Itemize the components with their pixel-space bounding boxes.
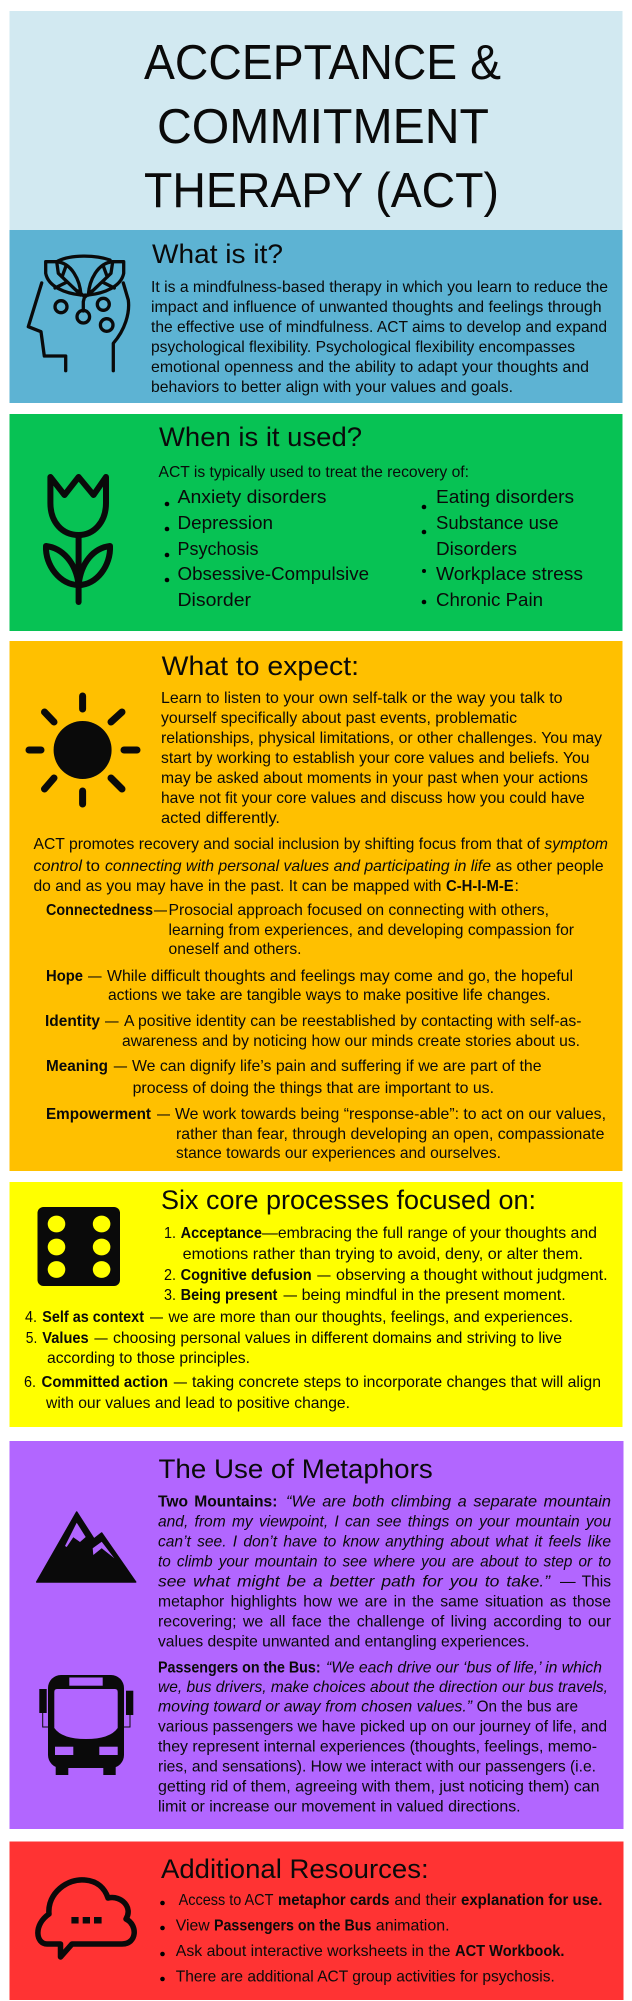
CHIME: meaning bbox=[46, 1058, 542, 1097]
intro text: ACT is typically used to treat the recovery of: bbox=[158, 464, 469, 481]
resource: animation: View bbox=[176, 1917, 210, 1934]
metaphor: two mountains: values despite unwanted and entangling experiences. bbox=[158, 1634, 530, 1651]
metaphor: passengers on the bus bbox=[158, 1660, 608, 1816]
process 4: self as context: 4. bbox=[25, 1309, 37, 1326]
icon: bus bbox=[39, 1675, 133, 1775]
resource: group activities: There are additional ACT group activities for psychosis. bbox=[176, 1969, 555, 1986]
CHIME: identity bbox=[45, 1013, 582, 1050]
body text: self-talk: start by working to establish your core values and beliefs. You bbox=[161, 750, 590, 767]
CHIME: identity: awareness and by noticing how our minds create stories about us. bbox=[122, 1033, 580, 1050]
body text: recovery and C-H-I-M-E intro: : bbox=[514, 878, 519, 895]
metaphor: two mountains bbox=[158, 1494, 612, 1651]
icon: sun bbox=[29, 696, 137, 804]
list: conditions left column: Psychosis bbox=[178, 538, 258, 559]
metaphor: two mountains: metaphor highlights how we are in the same situation as those bbox=[158, 1594, 611, 1611]
metaphor: two mountains: — This bbox=[560, 1574, 611, 1591]
metaphor: passengers on the bus: ries, and sensations). How we interact with our passengers (i.e. bbox=[158, 1759, 596, 1776]
CHIME: empowerment bbox=[46, 1106, 606, 1162]
body text: recovery and C-H-I-M-E intro: connecting with personal values and participating in life bbox=[105, 858, 491, 875]
body text: self-talk bbox=[161, 690, 602, 827]
body text: what is it bbox=[151, 279, 608, 396]
body text: what is it: behaviors to better align with your values and goals. bbox=[151, 379, 513, 396]
CHIME: connectedness: Prosocial approach focused on connecting with others, bbox=[168, 902, 549, 919]
title: ACCEPTANCE & bbox=[144, 36, 501, 90]
metaphor: two mountains: see what might be a better path for you to take.” bbox=[158, 1574, 551, 1591]
CHIME: identity: Identity bbox=[45, 1013, 100, 1030]
list: conditions right column bbox=[422, 486, 583, 610]
metaphor: two mountains: can’t see. I don’t have to know anything about what it feels like bbox=[158, 1534, 611, 1550]
CHIME: meaning: process of doing the things that are important to us. bbox=[133, 1080, 494, 1097]
CHIME: connectedness: — bbox=[154, 902, 167, 919]
CHIME: meaning: Meaning bbox=[46, 1058, 108, 1075]
metaphor: two mountains: and, from my viewpoint, I can see things on your mountain you bbox=[158, 1514, 611, 1530]
list: conditions left column: Depression bbox=[178, 512, 273, 533]
resource: animation: animation. bbox=[376, 1917, 450, 1934]
icon: mountains bbox=[37, 1512, 136, 1582]
CHIME: meaning: We can dignify life’s pain and suffering if we are part of the bbox=[132, 1058, 542, 1075]
process 1: acceptance: 1. bbox=[164, 1225, 176, 1242]
list: conditions right column: Disorders bbox=[436, 538, 517, 559]
resource: workbook bbox=[160, 1943, 564, 1960]
list: conditions left column: Anxiety disorders bbox=[178, 486, 326, 507]
process 4: self as context: we are more than our thoughts, feelings, and experiences. bbox=[168, 1309, 573, 1326]
CHIME: empowerment: rather than fear, through developing an open, compassionate bbox=[176, 1126, 604, 1143]
process 6: committed action: — bbox=[174, 1374, 187, 1391]
CHIME: hope: Hope bbox=[46, 968, 83, 985]
resource: animation: Passengers on the Bus bbox=[214, 1917, 371, 1934]
metaphor: two mountains: to climb your mountain to see where you are about to step or to bbox=[158, 1554, 611, 1571]
process 2: cognitive defusion: 2. bbox=[164, 1267, 176, 1284]
list: conditions left column: Obsessive-Compulsive bbox=[178, 563, 369, 584]
process 3: being present: Being present bbox=[181, 1287, 278, 1304]
heading: when is it used: When is it used? bbox=[159, 422, 362, 452]
body text: recovery and C-H-I-M-E intro: ACT promotes recovery and social inclusion by shifting focus from that of bbox=[34, 836, 541, 853]
body text: what is it: psychological flexibility. Psychological flexibility encompasses bbox=[151, 339, 575, 356]
process 1: acceptance: Acceptance bbox=[181, 1225, 262, 1242]
CHIME: empowerment: Empowerment bbox=[46, 1106, 152, 1123]
title: COMMITMENT bbox=[157, 100, 489, 154]
resource: animation bbox=[160, 1917, 450, 1934]
metaphor: passengers on the bus: we, bus drivers, make choices about the direction our bus travels, bbox=[158, 1679, 608, 1696]
panel: the use of metaphors bbox=[10, 1441, 624, 1829]
list: conditions right column: Chronic Pain bbox=[436, 589, 543, 610]
panel: title bbox=[10, 11, 622, 230]
list: conditions right column: Eating disorders bbox=[436, 486, 574, 507]
metaphor: passengers on the bus: Passengers on the Bus: bbox=[158, 1660, 321, 1676]
CHIME: hope: actions we take are tangible ways to make positive life changes. bbox=[108, 987, 550, 1004]
list: conditions right column: Substance use bbox=[436, 512, 558, 533]
process 5: values: according to those principles. bbox=[47, 1350, 250, 1367]
process 5: values: 5. bbox=[26, 1330, 37, 1347]
resource: metaphor cards: Access to ACT bbox=[179, 1892, 274, 1909]
process 1: acceptance: —embracing the full range of your thoughts and bbox=[262, 1225, 597, 1242]
body text: recovery and C-H-I-M-E intro: as other people bbox=[496, 858, 604, 875]
process 4: self as context: Self as context bbox=[42, 1309, 145, 1326]
body text: what is it: emotional openness and the ability to adapt your thoughts and bbox=[151, 359, 589, 376]
body text: self-talk: yourself specifically about past events, problematic bbox=[161, 710, 517, 727]
icon: die showing six bbox=[38, 1207, 120, 1286]
resource: workbook: Ask about interactive worksheets in the bbox=[176, 1943, 450, 1960]
process 1: acceptance bbox=[164, 1225, 597, 1263]
process 5: values: Values bbox=[42, 1330, 89, 1347]
panel: what to expect bbox=[10, 641, 622, 1171]
body text: recovery and C-H-I-M-E intro: C-H-I-M-E bbox=[446, 878, 514, 895]
process 4: self as context: — bbox=[150, 1309, 163, 1326]
process 5: values: choosing personal values in different domains and striving to live bbox=[113, 1330, 562, 1347]
process 6: committed action bbox=[24, 1374, 601, 1412]
CHIME: connectedness: learning from experiences, and developing compassion for bbox=[168, 922, 575, 939]
title: THERAPY (ACT) bbox=[144, 164, 499, 218]
body text: self-talk: acted differently. bbox=[161, 810, 280, 827]
body text: self-talk: relationships, physical limitations, or other challenges. You may bbox=[161, 730, 602, 747]
heading: what is it: What is it? bbox=[152, 239, 283, 269]
icon: tulip bbox=[46, 477, 110, 602]
title bbox=[144, 36, 501, 218]
body text: recovery and C-H-I-M-E intro: symptom bbox=[544, 836, 608, 853]
metaphor: passengers on the bus: various passengers we have picked up on our journey of life, and bbox=[158, 1718, 607, 1736]
body text: self-talk: Learn to listen to your own self-talk or the way you talk to bbox=[161, 690, 563, 707]
process 6: committed action: with our values and lead to positive change. bbox=[45, 1395, 350, 1412]
icon: cloud speech bubble bbox=[38, 1880, 134, 1957]
resource: metaphor cards: metaphor cards bbox=[278, 1892, 390, 1909]
body text: recovery and C-H-I-M-E intro: do and as you may have in the past. It can be mapped with bbox=[34, 878, 442, 895]
metaphor: passengers on the bus: getting rid of them, agreeing with them, just noticing them) can bbox=[158, 1779, 600, 1796]
resource: metaphor cards: explanation for use. bbox=[461, 1892, 602, 1909]
process 5: values bbox=[26, 1330, 562, 1367]
panel: when is it used bbox=[10, 414, 622, 631]
body text: self-talk: have not fit your core values and discuss how you could have bbox=[161, 790, 585, 807]
icon: head with leaves bbox=[28, 256, 129, 371]
CHIME: connectedness bbox=[46, 902, 575, 958]
metaphor: passengers on the bus: On the bus are bbox=[477, 1698, 578, 1716]
body text: recovery and C-H-I-M-E intro: to bbox=[86, 858, 100, 875]
metaphor: two mountains: Two Mountains: bbox=[158, 1494, 277, 1510]
metaphor: two mountains: “We are both climbing a separate mountain bbox=[286, 1494, 611, 1510]
process 6: committed action: taking concrete steps to incorporate changes that will align bbox=[192, 1374, 601, 1391]
resource: metaphor cards: and their bbox=[394, 1892, 457, 1909]
heading: additional resources: Additional Resources: bbox=[161, 1854, 429, 1884]
heading: the use of metaphors: The Use of Metaphors bbox=[158, 1454, 433, 1484]
resource: metaphor cards bbox=[160, 1892, 602, 1909]
CHIME: empowerment: stance towards our experiences and ourselves. bbox=[176, 1145, 501, 1162]
panel: what is it bbox=[10, 230, 622, 403]
list: conditions left column: Disorder bbox=[178, 589, 251, 610]
process 5: values: — bbox=[94, 1330, 108, 1347]
process 3: being present bbox=[164, 1287, 566, 1304]
CHIME: empowerment: — bbox=[157, 1106, 170, 1123]
metaphor: passengers on the bus: moving toward or away from chosen values.” bbox=[158, 1698, 473, 1716]
list: conditions left column bbox=[165, 486, 369, 610]
metaphor: passengers on the bus: they represent internal experiences (thoughts, feelings, memo- bbox=[158, 1739, 597, 1756]
process 6: committed action: Committed action bbox=[42, 1374, 168, 1391]
process 1: acceptance: emotions rather than trying to avoid, deny, or alter them. bbox=[183, 1246, 583, 1263]
panel: six core processes bbox=[10, 1182, 622, 1427]
body text: recovery and C-H-I-M-E intro: control bbox=[34, 858, 82, 875]
process 6: committed action: 6. bbox=[24, 1374, 36, 1391]
CHIME: connectedness: Connectedness bbox=[46, 902, 153, 919]
CHIME: hope: While difficult thoughts and feelings may come and go, the hopeful bbox=[107, 968, 573, 985]
heading: what to expect: What to expect: bbox=[162, 651, 359, 681]
process 2: cognitive defusion bbox=[164, 1267, 608, 1284]
heading: six core processes: Six core processes focused on: bbox=[161, 1185, 536, 1215]
resource: workbook: ACT Workbook. bbox=[455, 1943, 564, 1960]
CHIME: hope: — bbox=[88, 968, 102, 985]
process 3: being present: 3. bbox=[164, 1287, 176, 1304]
process 2: cognitive defusion: observing a thought without judgment. bbox=[336, 1267, 608, 1284]
CHIME: connectedness: oneself and others. bbox=[168, 941, 302, 958]
process 2: cognitive defusion: Cognitive defusion bbox=[181, 1267, 312, 1284]
CHIME: hope bbox=[46, 968, 573, 1004]
list: conditions right column: Workplace stress bbox=[436, 563, 583, 584]
metaphor: passengers on the bus: limit or increase our movement in valued directions. bbox=[158, 1799, 521, 1816]
CHIME: empowerment: We work towards being “response-able”: to act on our values, bbox=[175, 1106, 606, 1123]
metaphor: two mountains: recovering; we all face the challenge of living according to our bbox=[158, 1614, 612, 1631]
body text: recovery and C-H-I-M-E intro bbox=[34, 836, 608, 895]
body text: what is it: the effective use of mindfulness. ACT aims to develop and expand bbox=[151, 319, 607, 336]
process 3: being present: — bbox=[284, 1287, 297, 1304]
CHIME: identity: A positive identity can be reestablished by contacting with self-as- bbox=[124, 1013, 582, 1030]
body text: what is it: impact and influence of unwanted thoughts and feelings through bbox=[151, 299, 602, 316]
panel: additional resources bbox=[10, 1842, 624, 2000]
CHIME: identity: — bbox=[105, 1013, 119, 1030]
metaphor: passengers on the bus: “We each drive our ‘bus of life,’ in which bbox=[326, 1660, 602, 1676]
process 2: cognitive defusion: — bbox=[317, 1267, 331, 1284]
process 3: being present: being mindful in the present moment. bbox=[302, 1287, 566, 1304]
CHIME: meaning: — bbox=[114, 1058, 127, 1075]
body text: what is it: It is a mindfulness-based therapy in which you learn to reduce the bbox=[151, 279, 608, 296]
body text: self-talk: may be asked about moments in your past when your actions bbox=[161, 770, 588, 787]
